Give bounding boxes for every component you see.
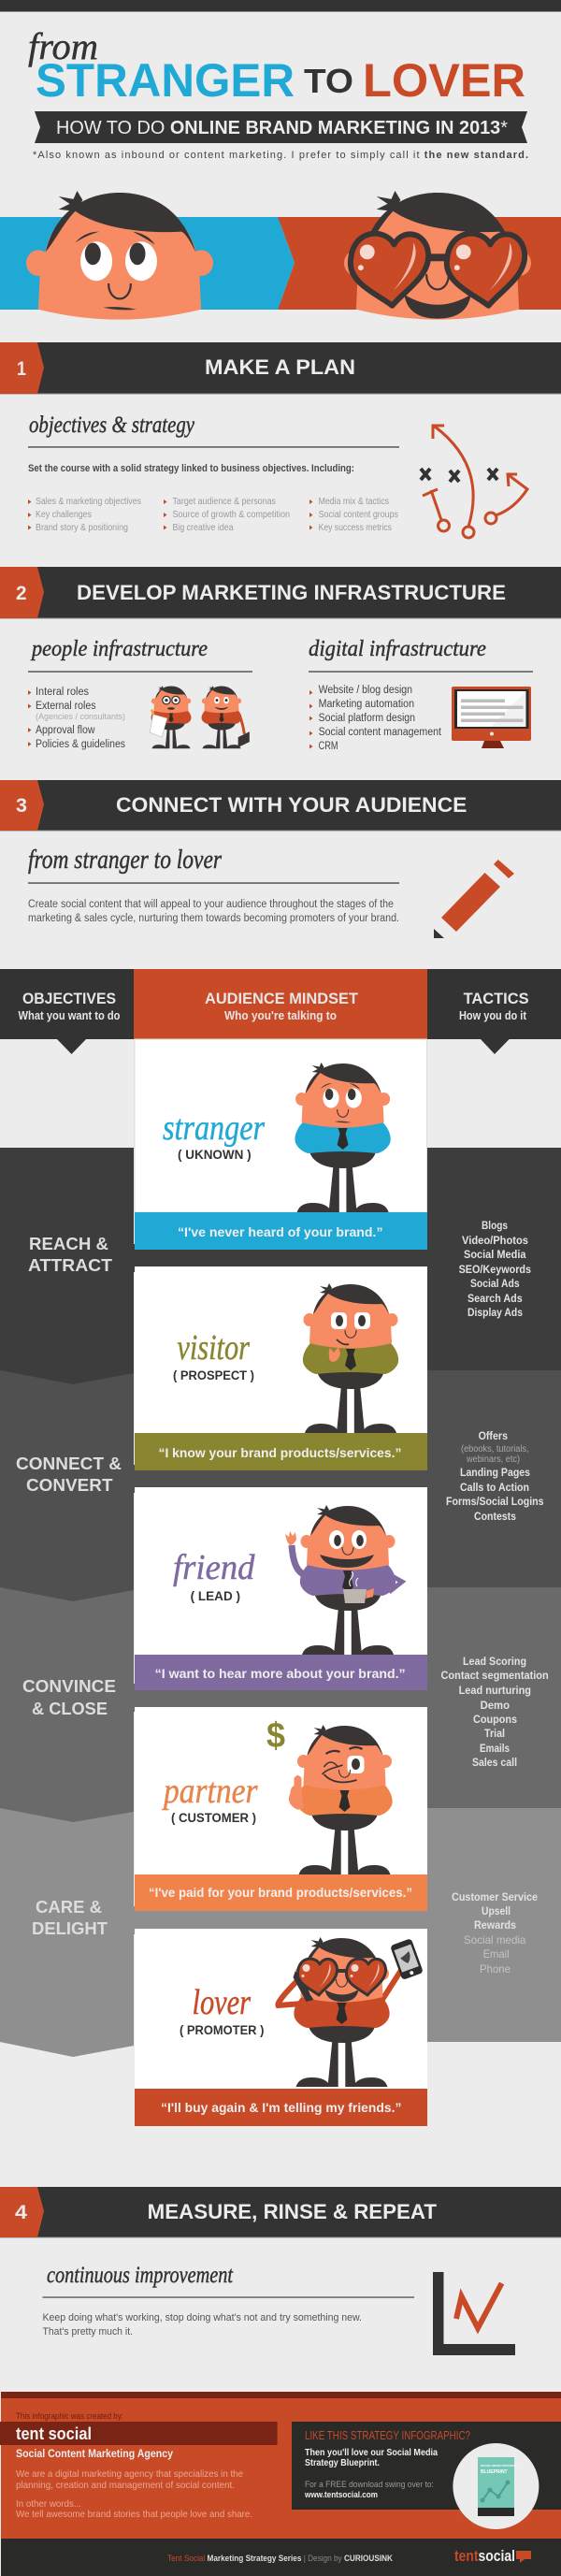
tactics: reach and attract: Blogs <box>482 1219 508 1232</box>
tactics: convince and close: Sales call <box>472 1756 517 1769</box>
objective: connect and convert <box>16 1454 122 1495</box>
character: stranger <box>295 1063 391 1212</box>
agency name bar: tent social <box>16 2424 92 2443</box>
panel: friend <box>135 1487 427 1690</box>
section 3 header <box>0 780 561 831</box>
character: friend <box>285 1505 402 1655</box>
tactics: connect and convert: webinars, etc) <box>466 1454 520 1465</box>
roles list: Policies & guidelines <box>36 739 125 750</box>
section 2 header: 2 <box>16 583 26 604</box>
section 1 header: MAKE A PLAN <box>205 355 355 379</box>
agency tagline: Social Content Marketing Agency <box>16 2447 173 2460</box>
heading: digital infrastructure <box>309 637 486 661</box>
objective list: Source of growth & competition <box>172 510 290 520</box>
objective: care and delight: CARE & <box>36 1897 102 1917</box>
title: to: TO <box>304 62 353 100</box>
column header: objectives: What you want to do <box>19 1009 121 1022</box>
quote: friend: “I want to hear more about your brand.” <box>155 1666 406 1681</box>
tactics: reach and attract: SEO/Keywords <box>459 1263 531 1276</box>
digital list: Social content management <box>319 727 442 738</box>
tactics: convince and close: Demo <box>481 1699 510 1712</box>
tactics: connect and convert <box>446 1429 544 1523</box>
tactics: connect and convert: (ebooks, tutorials, <box>461 1444 529 1454</box>
agency description: We are a digital marketing agency that specializes in the <box>16 2468 243 2480</box>
objective list: Brand story & positioning <box>36 523 128 533</box>
panel: partner <box>135 1707 427 1911</box>
panel: digital infrastructure <box>309 637 533 752</box>
quote: visitor: “I know your brand products/services.” <box>159 1445 401 1460</box>
section 4 header: 4 <box>15 2202 27 2223</box>
section 2 header <box>0 567 561 619</box>
objective: convince and close <box>22 1676 116 1718</box>
column header: tactics <box>427 969 561 1054</box>
tactics: connect and convert: Forms/Social Logins <box>446 1495 544 1508</box>
tactics: connect and convert: Landing Pages <box>460 1466 530 1479</box>
icon: blueprint book <box>453 2443 539 2529</box>
digital list: Website / blog design <box>319 685 412 696</box>
tactics: convince and close: Lead nurturing <box>459 1684 531 1697</box>
stage: unknown: ( UKNOWN ) <box>178 1148 252 1162</box>
objective list: Sales & marketing objectives <box>36 497 141 507</box>
tactics: reach and attract <box>459 1219 531 1319</box>
panel: from stranger to lover <box>28 846 514 938</box>
tactics: connect and convert: Offers <box>479 1429 508 1442</box>
tactics: care and delight: Email <box>483 1947 510 1961</box>
agency description: In other words... <box>16 2498 81 2510</box>
tactics: care and delight: Rewards <box>474 1918 516 1932</box>
label: partner: partner <box>161 1772 258 1811</box>
column header: audience mindset <box>134 969 427 1039</box>
panel: from stranger to lover: marketing & sales cycle, nurturing them towards becoming promoters of your brand. <box>28 913 399 924</box>
roles list: External roles <box>36 701 96 712</box>
panel: continuous improvement <box>43 2263 515 2355</box>
stage: promoter: ( PROMOTER ) <box>180 2023 264 2037</box>
objective list: Big creative idea <box>172 523 234 533</box>
objective list: Social content groups <box>319 510 398 520</box>
stage: lead: ( LEAD ) <box>191 1589 240 1603</box>
panel: visitor <box>135 1266 427 1470</box>
objective list <box>28 497 398 533</box>
tactics: reach and attract: Display Ads <box>468 1306 523 1319</box>
quote: friend <box>135 1655 427 1690</box>
agency description: planning, creation and management of social content. <box>16 2480 235 2491</box>
heading: from stranger to lover <box>28 846 222 875</box>
digital list: Marketing automation <box>319 699 414 710</box>
quote: visitor <box>135 1433 427 1470</box>
digital list <box>309 685 442 752</box>
tactics: care and delight: Customer Service <box>452 1890 538 1903</box>
objective list: Key challenges <box>36 510 92 520</box>
tactics: care and delight: Phone <box>480 1962 511 1975</box>
section 1 header <box>0 342 561 395</box>
quote: stranger: “I've never heard of your brand.” <box>178 1224 383 1239</box>
icon: monitor <box>452 687 531 748</box>
icon: line chart <box>433 2272 515 2355</box>
digital list: CRM <box>319 741 338 752</box>
tactics: care and delight: Upsell <box>482 1904 511 1918</box>
label: stranger: stranger <box>163 1108 265 1148</box>
objective list: Media mix & tactics <box>319 497 389 507</box>
agency description <box>16 2468 252 2520</box>
column header: tactics: How you do it <box>459 1009 527 1022</box>
title: stranger: STRANGER <box>36 54 295 107</box>
heading: objectives & strategy <box>29 412 195 438</box>
icon: character with glasses and clipboard <box>150 686 191 748</box>
column header: audience mindset: Who you're talking to <box>224 1009 337 1022</box>
subtitle ribbon <box>35 111 527 143</box>
hero band <box>0 191 561 320</box>
agency name bar <box>0 2422 278 2445</box>
hero: stranger face <box>26 191 213 320</box>
tactics: care and delight <box>452 1890 538 1975</box>
objective: care and delight <box>32 1897 108 1938</box>
label: lover: lover <box>193 1983 251 2022</box>
tactics: connect and convert: Contests <box>474 1510 516 1523</box>
footer: blueprint callout: Strategy Blueprint. <box>305 2457 380 2468</box>
heading: continuous improvement <box>47 2263 234 2288</box>
digital list: Social platform design <box>319 713 415 724</box>
top bar <box>0 0 561 11</box>
tactics: convince and close <box>441 1655 549 1769</box>
section 3 header: 3 <box>16 795 27 817</box>
tactics: convince and close: Trial <box>484 1727 505 1740</box>
objective: care and delight: DELIGHT <box>32 1918 108 1938</box>
heading: people infrastructure <box>30 637 208 661</box>
column header: objectives: OBJECTIVES <box>22 991 116 1007</box>
intro text: Set the course with a solid strategy linked to business objectives. Including: <box>28 463 354 474</box>
stage: customer: ( CUSTOMER ) <box>171 1811 256 1825</box>
credit line: This infographic was created by: <box>16 2411 123 2422</box>
stage: prospect: ( PROSPECT ) <box>173 1368 254 1382</box>
icon: playbook <box>421 426 527 538</box>
quote: partner: “I've paid for your brand products/services.” <box>149 1885 412 1900</box>
section 4 header: MEASURE, RINSE & REPEAT <box>148 2200 438 2223</box>
panel: people infrastructure <box>28 637 252 750</box>
quote: stranger <box>135 1212 427 1250</box>
title: from: from <box>28 25 98 67</box>
icon: blueprint book: SOCIAL MEDIA STRATEGY <box>481 2464 517 2467</box>
objective: reach and attract: REACH & <box>29 1234 108 1253</box>
character: partner <box>289 1725 393 1874</box>
icon: blueprint book: BLUEPRINT <box>481 2469 508 2475</box>
tactics: convince and close: Coupons <box>473 1713 517 1726</box>
series credit: Tent Social Marketing Strategy Series | Design by CURIOUSINK <box>167 2554 393 2564</box>
footnote: *Also known as inbound or content marketing. I prefer to simply call it the new standard. <box>33 150 528 161</box>
objective: convince and close: & CLOSE <box>32 1699 108 1718</box>
roles list: Approval flow <box>36 725 95 736</box>
panel: objectives and strategy <box>28 412 527 538</box>
tactics: reach and attract: Video/Photos <box>462 1234 528 1247</box>
column header: objectives <box>0 969 134 1054</box>
objective: reach and attract: ATTRACT <box>28 1255 113 1275</box>
funnel stages background <box>0 1148 561 2057</box>
tactics: reach and attract: Search Ads <box>468 1292 523 1305</box>
section 3 header: CONNECT WITH YOUR AUDIENCE <box>116 793 467 817</box>
character: visitor <box>303 1283 398 1433</box>
tactics: connect and convert: Calls to Action <box>460 1481 529 1494</box>
tactics: convince and close: Contact segmentation <box>441 1669 549 1682</box>
tactics: convince and close: Lead Scoring <box>463 1655 526 1668</box>
roles list <box>28 687 125 750</box>
section 1 header: 1 <box>17 358 26 380</box>
agency description: We tell awesome brand stories that people love and share. <box>16 2509 252 2520</box>
title <box>28 25 525 107</box>
logo: tentsocial: tentsocial <box>454 2547 515 2565</box>
footer: agency panel <box>0 2392 561 2539</box>
column header: audience mindset: AUDIENCE MINDSET <box>205 991 358 1007</box>
icon: pencil <box>434 860 514 938</box>
tactics: convince and close: Emails <box>480 1742 510 1755</box>
tactics: care and delight: Social media <box>464 1933 526 1946</box>
footer: blueprint callout <box>292 2422 561 2529</box>
icon: dollar sign: $ <box>266 1716 285 1756</box>
body text: Keep doing what's working, stop doing what's not and try something new. <box>43 2312 362 2323</box>
body text: Create social content that will appeal to your audience throughout the stages of the <box>28 899 394 910</box>
footer: credits bar <box>1 2539 561 2576</box>
roles list: (Agencies / consultants) <box>36 712 125 722</box>
label: visitor: visitor <box>177 1328 250 1368</box>
quote: lover <box>135 2089 427 2126</box>
panel: continuous improvement: That's pretty much it. <box>43 2326 133 2337</box>
subtitle ribbon: HOW TO DO ONLINE BRAND MARKETING IN 2013* <box>56 118 508 138</box>
column header: tactics: TACTICS <box>464 991 529 1007</box>
footer: blueprint callout: Then you'll love our Social Media <box>305 2447 438 2458</box>
objective list: Key success metrics <box>319 523 392 533</box>
footer: blueprint callout: www.tentsocial.com <box>304 2490 378 2500</box>
label: friend: friend <box>173 1548 255 1587</box>
section 4 header <box>0 2187 561 2237</box>
tactics: reach and attract: Social Media <box>464 1248 526 1261</box>
quote: partner <box>135 1874 427 1911</box>
footer: blueprint callout: For a FREE download swing over to: <box>305 2480 434 2490</box>
icon: character with briefcase <box>202 686 250 748</box>
section 2 header: DEVELOP MARKETING INFRASTRUCTURE <box>77 581 506 604</box>
panel: lover <box>135 1929 427 2126</box>
character: lover <box>278 1937 424 2087</box>
objective list: Target audience & personas <box>172 497 276 507</box>
tactics: reach and attract: Social Ads <box>470 1277 520 1290</box>
quote: lover: “I'll buy again & I'm telling my friends.” <box>161 2100 401 2115</box>
hero: lover face <box>344 191 531 320</box>
objective: convince and close: CONVINCE <box>22 1676 116 1696</box>
objective: connect and convert: CONVERT <box>26 1475 113 1495</box>
title: lover: LOVER <box>363 54 525 107</box>
roles list: Interal roles <box>36 687 89 698</box>
objective: reach and attract <box>28 1234 113 1275</box>
panel: stranger <box>135 1039 427 1250</box>
footer: blueprint callout: LIKE THIS STRATEGY INFOGRAPHIC? <box>305 2429 470 2442</box>
objective: connect and convert: CONNECT & <box>16 1454 122 1473</box>
